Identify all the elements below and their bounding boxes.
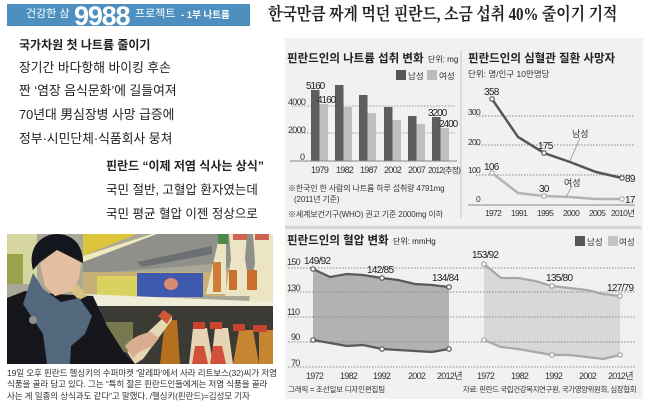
axis labels: sodium: 1982: [336, 165, 354, 175]
banner text: 건강한 삼: [26, 8, 70, 20]
axis labels: sodium: 2000: [288, 125, 306, 135]
labels: cardio: 358: [484, 87, 500, 98]
axis labels: sodium: 2012(추정): [428, 165, 461, 175]
value labels: sodium: 3200: [428, 108, 448, 119]
heading: sodium: 핀란드인의 나트륨 섭취 변화: [287, 53, 424, 65]
footnote: sodium: (2011년 기준): [294, 194, 340, 204]
banner text: [26, 4, 230, 26]
axis labels: cardio: 2010년: [611, 208, 634, 218]
axis labels: sodium: 1987: [360, 165, 378, 175]
axis labels: blood pressure: 70: [291, 358, 300, 368]
legend: blood pressure: 남성: [587, 237, 603, 247]
banner: [7, 4, 250, 26]
legend: sodium: [396, 70, 455, 81]
unit: cardio: 단위: 명/인구 10만명당: [468, 69, 550, 79]
subheadline block 1: 국가차원 첫 나트륨 줄이기: [19, 38, 150, 52]
banner text: - 1부 나트륨: [181, 10, 230, 21]
axis labels: cardio: 200: [468, 137, 481, 147]
value labels: blood pressure: 149/92: [304, 256, 332, 267]
heading: sodium: 단위: mg: [428, 54, 458, 64]
subheadline block 1: 70년대 男심장병 사망 급증에: [19, 107, 174, 122]
axis labels: blood pressure: 2012년: [608, 371, 633, 381]
labels: cardio: 89: [625, 174, 636, 185]
axis labels: sodium: 0: [300, 152, 305, 162]
legend: blood pressure: [575, 236, 635, 247]
legend: blood pressure: 여성: [619, 237, 635, 247]
axis labels: cardio: 300: [468, 107, 481, 117]
axis labels: blood pressure: 1972: [477, 371, 495, 381]
main title: 한국만큼 짜게 먹던 핀란드, 소금 섭취 40% 줄이기 기적: [268, 4, 617, 24]
axis labels: blood pressure: 110: [287, 307, 300, 317]
subheadline block 1: 짠 ‘염장 음식문화’에 길들여져: [19, 83, 177, 98]
legend: sodium: 여성: [439, 71, 455, 81]
panel: blood pressure chart: [287, 233, 636, 394]
axis labels: blood pressure: 1982: [340, 371, 358, 381]
line: female deaths: [492, 173, 622, 199]
footnote: sodium: [288, 183, 444, 219]
subheadline block 2: [106, 159, 264, 221]
value labels: blood pressure: 153/92: [472, 250, 500, 261]
lines: male blood pressure: [313, 269, 449, 352]
axis labels: blood pressure: 1982: [511, 371, 529, 381]
axis labels: cardio: [468, 107, 634, 218]
area: male blood pressure: [313, 269, 449, 352]
labels: cardio: [484, 87, 636, 206]
axis labels: cardio: 0: [476, 194, 481, 204]
photo caption: 사는 게 일종의 상식과도 같다"고 말했다. /헬싱키(핀란드)=김성모 기자: [7, 391, 250, 401]
axis labels: blood pressure: 1992: [373, 371, 391, 381]
axis labels: blood pressure: 2012년: [437, 371, 462, 381]
subheadline block 2: 핀란드 “이제 저염 식사는 상식”: [106, 159, 264, 173]
line: male deaths: [492, 99, 622, 178]
axis labels: cardio: 1995: [537, 208, 554, 218]
value labels: sodium: 2400: [439, 119, 459, 130]
axis labels: blood pressure: 150: [287, 257, 301, 267]
axis labels: cardio: 2000: [563, 208, 580, 218]
subheadline block 2: 국민 절반, 고혈압 환자였는데: [106, 183, 258, 197]
bar chart: sodium: [290, 85, 457, 161]
footnote: sodium: ※한국인 한 사람의 나트륨 하루 섭취량 4791mg: [288, 183, 444, 193]
labels: cardio: 175: [538, 141, 554, 152]
value labels: blood pressure: 127/79: [607, 283, 635, 294]
axis labels: cardio: 1991: [511, 208, 528, 218]
axis labels: blood pressure: 130: [287, 283, 301, 293]
panel: cardiovascular deaths chart: 여성: [564, 177, 581, 188]
axis labels: blood pressure: 90: [291, 332, 300, 342]
credit: source: 자료: 핀란드 국립건강복지연구원, 국가영양위원회, 심장협회: [463, 385, 636, 394]
subheadline block 2: 국민 평균 혈압 이젠 정상으로: [106, 207, 258, 221]
subheadline block 1: 장기간 바다항해 바이킹 후손: [19, 60, 171, 75]
value labels: blood pressure: 142/85: [367, 265, 395, 276]
heading: cardio: 핀란드인의 심혈관 질환 사망자: [468, 51, 616, 65]
axis labels: cardio: 2005: [589, 208, 606, 218]
axis labels: sodium: 1979: [311, 165, 329, 175]
axis labels: blood pressure: 1972: [306, 371, 324, 381]
value labels: blood pressure: [304, 250, 635, 294]
value labels: sodium: [306, 81, 459, 130]
value labels: blood pressure: 134/84: [432, 273, 460, 284]
axis labels: sodium: [288, 97, 461, 175]
labels: cardio: 17: [625, 195, 636, 206]
heading: blood pressure: 핀란드인의 혈압 변화: [287, 235, 389, 247]
credit: graphic: 그래픽 = 조선일보 디자인편집팀: [288, 384, 385, 394]
value labels: blood pressure: 135/80: [546, 273, 574, 284]
value labels: sodium: 5160: [306, 81, 326, 92]
axis labels: blood pressure: 2002: [408, 371, 426, 381]
photo: shopper in supermarket: [7, 234, 273, 364]
subheadline block 1: [19, 38, 177, 146]
labels: cardio: 30: [539, 184, 550, 195]
banner text: 프로젝트: [135, 8, 175, 20]
axis labels: blood pressure: 2002: [579, 371, 597, 381]
heading: blood pressure: 단위: mmHg: [393, 236, 436, 246]
panel: sodium intake chart: [287, 51, 461, 219]
value labels: sodium: 4160: [317, 95, 337, 106]
area: female blood pressure: [484, 264, 620, 359]
photo caption: 식품을 골라 담고 있다. 그는 "특히 젊은 핀란드인들에게는 저염 식품을 골라: [7, 379, 267, 389]
legend: sodium: 남성: [408, 71, 424, 81]
axis labels: blood pressure: 1992: [545, 371, 563, 381]
lines: female blood pressure: [484, 264, 620, 359]
axis labels: sodium: 2002: [384, 165, 402, 175]
axis labels: cardio: 1972: [485, 208, 502, 218]
panel: cardiovascular deaths chart: 남성: [572, 129, 589, 139]
axis labels: cardio: 100: [468, 165, 481, 175]
axis labels: sodium: 2007: [408, 165, 426, 175]
labels: cardio: 106: [484, 162, 500, 173]
subheadline block 1: 정부·시민단체·식품회사 뭉쳐: [19, 131, 172, 146]
axis labels: blood pressure: [287, 257, 633, 381]
photo caption: [7, 368, 277, 401]
axis labels: sodium: 4000: [288, 97, 306, 107]
panel: cardiovascular deaths chart: [468, 51, 636, 218]
panel: charts background: [285, 38, 643, 399]
photo caption: 19일 오후 핀란드 헬싱키의 수퍼마켓 '알레파'에서 사라 리트보스(32)씨가 저염: [7, 368, 277, 378]
footnote: sodium: ※세계보건기구(WHO) 권고 기준 2000mg 이하: [288, 209, 444, 219]
